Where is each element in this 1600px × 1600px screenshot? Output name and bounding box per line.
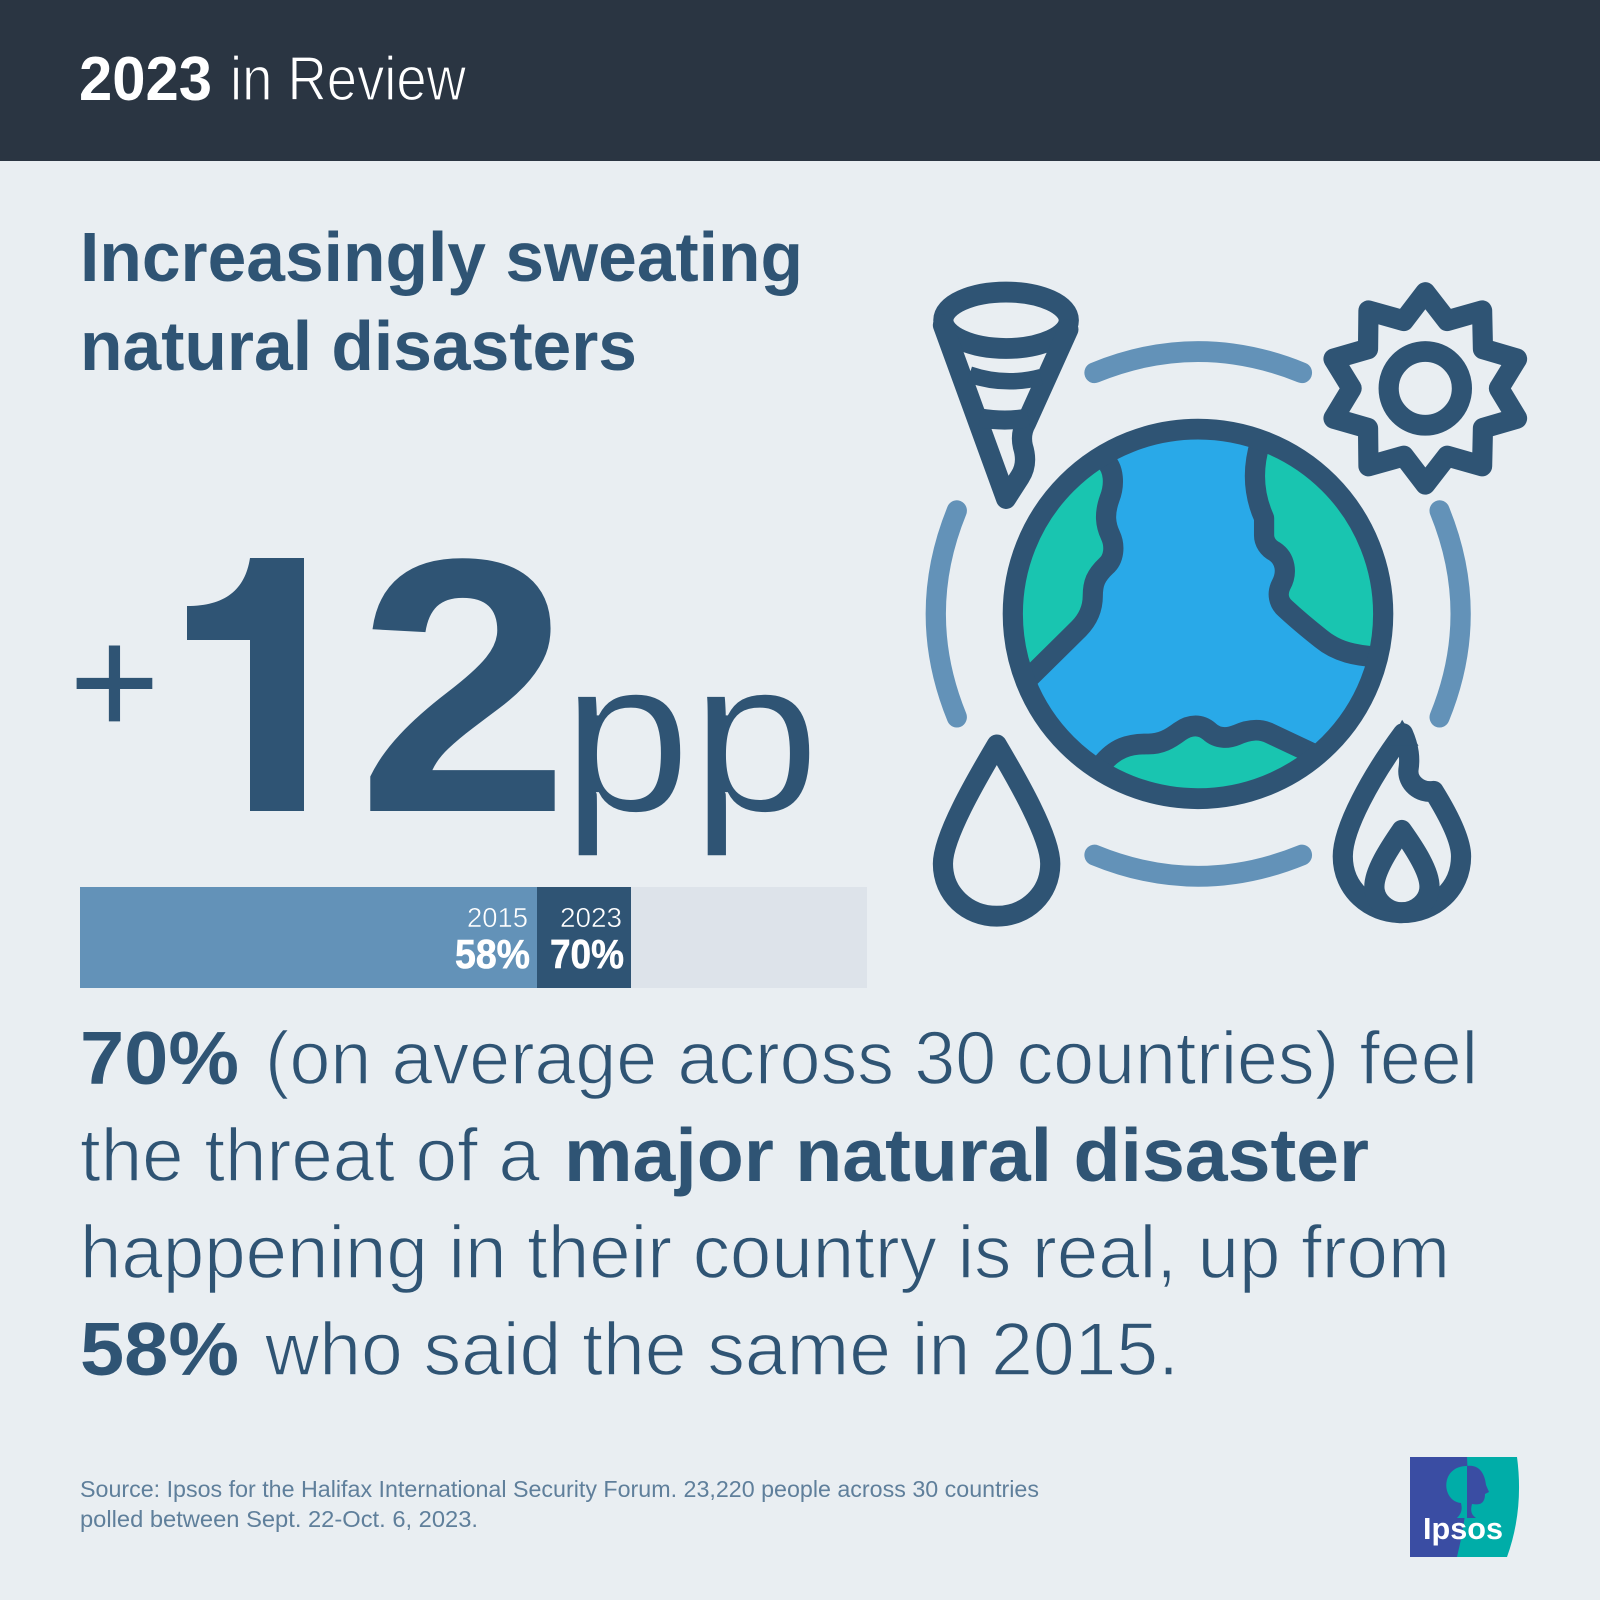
- bar segment 2023: [537, 887, 631, 988]
- icon: tornado: [943, 292, 1069, 499]
- big stat: +12pp: [76, 558, 810, 856]
- big stat: +12pp: 2: [357, 483, 570, 888]
- source note: Source: Ipsos for the Halifax International Security Forum. 23,220 people across 30 countries: [80, 1476, 1039, 1502]
- bar segment 2015: 2015: [467, 902, 528, 933]
- heading: [80, 218, 803, 385]
- source note: [80, 1476, 1039, 1532]
- header title: 2023: [79, 45, 212, 114]
- body text: (on average across 30 countries) feel: [265, 1016, 1478, 1100]
- big stat: +12pp: 1: [158, 491, 383, 887]
- icon: fire: [1343, 720, 1461, 913]
- source note: polled between Sept. 22-Oct. 6, 2023.: [80, 1506, 478, 1532]
- icon: globe: [1002, 418, 1394, 810]
- heading: Increasingly sweating: [80, 218, 803, 296]
- big stat: +12pp: pp: [562, 615, 820, 858]
- header band: [0, 0, 1600, 161]
- icon group: earth and disasters: [936, 292, 1517, 916]
- bar segment 2023: 2023: [560, 902, 622, 933]
- bar segment 2023: 70%: [550, 931, 624, 977]
- body text: the threat of a: [80, 1113, 540, 1197]
- progress bar chart: [80, 887, 867, 988]
- body text: 58%: [80, 1307, 239, 1391]
- logo: Ipsos: Ipsos: [1423, 1511, 1503, 1546]
- heading: natural disasters: [80, 307, 637, 385]
- icon: water drop: [943, 745, 1050, 916]
- big stat: +12pp: +: [69, 595, 160, 768]
- icon: sun: [1334, 293, 1517, 484]
- header subtitle: in Review: [230, 45, 466, 114]
- body text: happening in their country is real, up from: [80, 1210, 1450, 1294]
- body text: who said the same in 2015.: [264, 1307, 1179, 1391]
- body text: major natural disaster: [564, 1113, 1369, 1197]
- bar segment 2015: 58%: [455, 931, 530, 977]
- body text: 70%: [80, 1016, 239, 1100]
- bar segment 2015: [80, 887, 537, 988]
- decorative ring arcs: [936, 352, 1461, 876]
- body text: [80, 1016, 1478, 1391]
- logo: Ipsos: [1410, 1457, 1519, 1557]
